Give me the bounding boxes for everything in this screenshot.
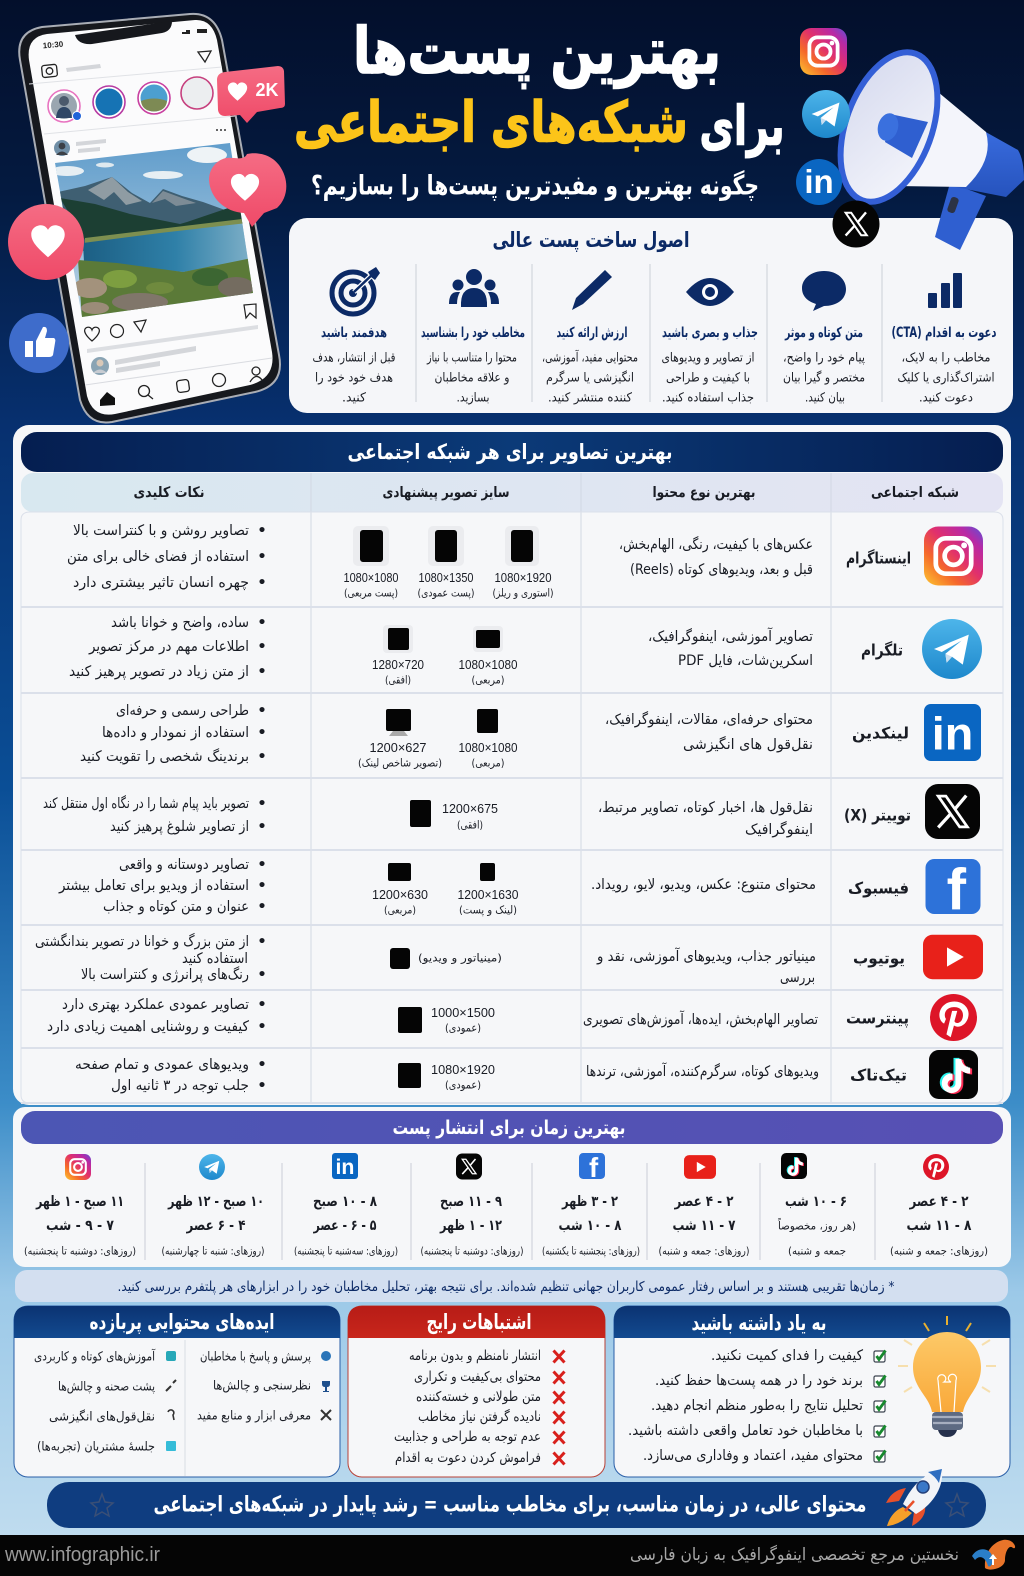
row: twitter x: •: [257, 796, 267, 812]
times title bar: [21, 1111, 1003, 1144]
principle 2 text: [783, 325, 865, 404]
row: linkedin: 1200×627: [370, 741, 427, 755]
title line 2 white: برای: [700, 94, 784, 158]
icon: light bulb: [898, 1316, 996, 1437]
row: linkedin: لینکدین: [852, 724, 909, 742]
row: twitter x: [43, 784, 980, 839]
row: linkedin: •: [257, 749, 267, 765]
row: tiktok: ویدیوهای کوتاه، سرگرم‌کننده، آموزشی، ترندها: [586, 1062, 819, 1080]
title: [294, 15, 784, 202]
row: facebook: •: [257, 899, 267, 915]
row: telegram: (مربعی): [472, 674, 504, 686]
row: telegram: 1080×1080: [458, 658, 518, 672]
remember header: [614, 1306, 1010, 1338]
remember list: کیفیت را فدای کمیت نکنید.: [711, 1348, 863, 1364]
time: pinterest: (روزهای: جمعه و شنبه): [890, 1244, 988, 1258]
post header: [54, 140, 70, 156]
time: youtube: (روزهای: جمعه و شنبه): [658, 1244, 750, 1258]
panel: best images table: [13, 425, 1011, 1105]
row: instagram: (پست مربعی): [344, 586, 398, 600]
principle 5 text: [421, 325, 525, 406]
time: youtube: ۲ - ۴ عصر: [674, 1194, 734, 1210]
row: pinterest: تصاویر الهام‌بخش، ایده‌ها، آموزش‌های تصویری: [583, 1010, 818, 1028]
principle 4 text: ارزش ارائه کنید: [556, 325, 628, 341]
icon: x circle: [832, 200, 880, 248]
commenter avatar: [91, 357, 109, 375]
mistakes list: انتشار نامنظم و بدون برنامه: [409, 1348, 541, 1364]
panel: principles: [289, 218, 1013, 413]
time: pinterest: ۲ - ۴ عصر: [909, 1194, 969, 1210]
row: facebook: (لینک و پست): [459, 904, 517, 916]
ideas header: ایده‌های محتوایی پربازده: [90, 1310, 274, 1334]
panel: content ideas: [14, 1306, 340, 1477]
icon: 2K like bubble: [217, 66, 285, 123]
icon: like circle: [9, 313, 69, 373]
icon: bar chart: [928, 273, 962, 308]
time: telegram: (روزهای: شنبه تا چهارشنبه): [162, 1244, 264, 1258]
row: twitter x: 1200×675: [442, 802, 498, 816]
icon: instagram: [800, 28, 847, 75]
megaphone rim: [822, 39, 956, 215]
icon: linkedin circle: [796, 159, 842, 205]
row: facebook: عنوان و متن کوتاه و جذاب: [103, 899, 249, 915]
row: pinterest: 1000×1500: [431, 1006, 495, 1020]
principle 3 text: با کیفیت و طراحی: [666, 370, 750, 386]
row: youtube: •: [257, 967, 267, 983]
table header row: نکات کلیدی: [134, 485, 204, 501]
row: instagram: عکس‌های با کیفیت، رنگی، الهام‌بخش،: [619, 536, 813, 553]
principle 6 text: کنید.: [342, 390, 366, 404]
megaphone trigger: [947, 196, 959, 214]
row: facebook: •: [257, 857, 267, 873]
principle 2 text: بیان کنید.: [805, 390, 845, 404]
principle 5 text: بسازید.: [456, 390, 490, 406]
principle 1 text: دعوت کنید.: [919, 390, 973, 406]
row: pinterest: •: [257, 1019, 267, 1035]
principles title: اصول ساخت پست عالی: [492, 228, 690, 252]
row: instagram: •: [257, 549, 267, 565]
principle 4 text: محتوایی مفید، آموزشی،: [542, 350, 638, 366]
mistakes list: متن طولانی و خسته‌کننده: [416, 1389, 541, 1405]
title line 1: بهترین پست‌ها: [353, 15, 721, 89]
icon: audience: [449, 269, 499, 307]
banner: [47, 1469, 986, 1528]
row: tiktok: تیک‌تاک: [850, 1066, 907, 1084]
note bar: * زمان‌ها تقریبی هستند و بر اساس رفتار عمومی کاربران جهانی تنظیم شده‌اند. برای نتیجه بهتر، تحلیل مخاطبان خود را در ابزارهای هر پلتفرم بررسی کنید.: [118, 1279, 895, 1295]
principle 4 text: کننده منتشر کنید.: [548, 390, 632, 406]
principle 2 text: متن کوتاه و موثر: [784, 325, 863, 341]
time: linkedin: (روزهای: سه‌شنبه تا پنجشنبه): [294, 1244, 398, 1258]
icon: pencil: [572, 270, 612, 310]
principle 1 text: مخاطب را به لایک،: [902, 350, 990, 366]
table header row: بهترین نوع محتوا: [652, 485, 756, 501]
principle 3 text: جذاب و بصری باشید: [662, 325, 758, 341]
row: linkedin: نقل‌قول های انگیزشی: [683, 736, 813, 753]
icon: eye: [686, 278, 734, 306]
time: telegram: [162, 1154, 264, 1258]
stories: [48, 77, 213, 122]
ideas left column: [34, 1348, 176, 1454]
row: instagram: •: [257, 523, 267, 539]
mistakes list: نادیده گرفتن نیاز مخاطب: [418, 1408, 541, 1425]
principle 6 text: قبل از انتشار، هدف: [312, 350, 396, 366]
phone mockup: [19, 14, 280, 423]
ideas right column: پرسش و پاسخ با مخاطبان: [200, 1348, 311, 1364]
time: instagram: ۷ - ۹ - شب: [46, 1218, 114, 1234]
row: telegram: اسکرین‌شات، فایل PDF: [678, 653, 813, 669]
row: instagram: استفاده از فضای خالی برای متن: [67, 549, 249, 565]
ideas left column: جلسهٔ مشتریان (تجربه‌ها): [37, 1438, 155, 1454]
row: youtube: [35, 932, 983, 986]
icon: speech bubble: [802, 271, 846, 311]
row: twitter x: از تصاویر شلوغ پرهیز کنید: [110, 819, 249, 835]
row: linkedin: برندینگ شخصی را تقویت کنید: [80, 747, 249, 765]
status time: 10:30: [42, 40, 64, 50]
mistakes list: محتوای بی‌کیفیت و تکراری: [414, 1369, 541, 1385]
principle 4 text: انگیزشی یا سرگرم‌: [546, 370, 634, 386]
row: facebook: استفاده از ویدیو برای تعامل بیشتر: [58, 878, 249, 894]
icon: footer logo: [972, 1540, 1015, 1570]
row: linkedin: استفاده از نمودار و داده‌ها: [102, 725, 249, 741]
row: instagram: •: [257, 575, 267, 591]
row: facebook: [58, 857, 981, 923]
row: facebook: تصاویر دوستانه و واقعی: [119, 857, 249, 873]
principle 3 text: [662, 325, 758, 404]
table header row: سایز تصویر پیشنهادی: [382, 485, 510, 501]
time: linkedin: ۸ - ۱۰ صبح: [313, 1194, 377, 1210]
row: telegram: [69, 615, 982, 686]
row: tiktok: 1080×1920: [431, 1063, 495, 1077]
table header row: شبکه اجتماعی: [871, 485, 959, 501]
mistakes list: [394, 1348, 564, 1466]
time: telegram: ۴ - ۶ عصر: [186, 1218, 246, 1234]
row: telegram: از متن زیاد در تصویر پرهیز کنید: [69, 664, 249, 680]
row: tiktok: •: [257, 1057, 267, 1073]
row: pinterest: [47, 994, 977, 1041]
time: facebook: ۲ - ۳ ظهر: [561, 1194, 618, 1210]
principle 3 text: جذاب استفاده کنید.: [662, 390, 754, 404]
row: tiktok: (عمودی): [445, 1078, 481, 1092]
row: instagram: 1080×1350: [418, 571, 474, 585]
principle 2 text: مختصر و گیرا بیان: [783, 370, 865, 386]
row: twitter x: نقل‌قول ها، اخبار کوتاه، تصاویر مرتبط،: [598, 800, 813, 816]
row: instagram: اینستاگرام: [846, 548, 911, 568]
megaphone cone: [895, 92, 988, 187]
time: instagram: ۱۱ صبح - ۱ ظهر: [35, 1194, 124, 1210]
row: tiktok: •: [257, 1078, 267, 1094]
row: linkedin: محتوای حرفه‌ای، مقالات، اینفوگرافیک،: [605, 711, 813, 728]
row: tiktok: جلب توجه در ۳ ثانیه اول: [111, 1078, 249, 1094]
row: telegram: •: [257, 639, 267, 655]
row: telegram: •: [257, 664, 267, 680]
phone notch: [75, 21, 172, 44]
row: instagram: تصاویر روشن و با کنتراست بالا: [73, 523, 249, 539]
row: youtube: استفاده کنید: [182, 951, 248, 967]
remember list: تحلیل نتایج را به‌طور منظم انجام دهید.: [651, 1398, 863, 1414]
phone body: [19, 14, 280, 423]
row: twitter x: تصویر باید پیام شما را در نگاه اول منتقل کند: [43, 795, 249, 812]
time: pinterest: ۸ - ۱۱ شب: [906, 1218, 972, 1234]
row: pinterest: تصاویر عمودی عملکرد بهتری دارد: [62, 997, 249, 1013]
panel: best posting times: [13, 1107, 1011, 1267]
time: x: ۹ - ۱۱ صبح: [440, 1194, 502, 1210]
principle 5 text: مخاطب خود را بشناسید: [421, 325, 525, 341]
status icons: [178, 29, 207, 34]
principle 6 text: [312, 325, 396, 404]
row: linkedin: (مربعی): [472, 756, 504, 770]
principle 2 text: پیام خود را واضح،: [783, 350, 865, 366]
post actions: [85, 304, 256, 341]
principle 6 text: هدف خود خود را: [315, 370, 393, 386]
row: instagram: 1080×1080: [344, 571, 399, 585]
remember list: [628, 1348, 886, 1464]
panel: common mistakes: [348, 1306, 605, 1477]
icon: linkedin circle: in: [804, 163, 834, 200]
time: linkedin: ۵ - ۶ - عصر: [313, 1218, 377, 1234]
principle 3 text: از تصاویر و ویدیوهای: [662, 350, 754, 366]
principle 4 text: [542, 325, 638, 406]
time: tiktok: ۶ - ۱۰ شب: [785, 1194, 847, 1210]
mistakes list: فراموش کردن دعوت به اقدام: [395, 1450, 541, 1466]
row: youtube: بررسی: [780, 970, 815, 986]
principle 5 text: محتوا را متناسب با نیاز: [426, 350, 517, 366]
row: instagram: 1080×1920: [494, 571, 552, 585]
time: facebook: [542, 1152, 640, 1258]
row: twitter x: اینفوگرافیک: [745, 821, 813, 838]
row: instagram: قبل و بعد، ویدیوهای کوتاه (Reels): [630, 562, 813, 578]
row: youtube: یوتیوب: [853, 948, 905, 968]
phone screen: [29, 20, 273, 415]
mistakes list: عدم توجه به طراحی و جذابیت: [394, 1429, 541, 1445]
row: facebook: 1200×1630: [458, 888, 519, 902]
row: pinterest: (عمودی): [445, 1022, 481, 1034]
row: pinterest: •: [257, 997, 267, 1013]
row: facebook: (مربعی): [384, 904, 416, 916]
row: linkedin: 1080×1080: [458, 741, 518, 755]
time: facebook: ۸ - ۱۰ شب: [558, 1218, 622, 1234]
row: telegram: ساده، واضح و خوانا باشد: [111, 615, 249, 631]
row: youtube: رنگ‌های پرانرژی و کنتراست بالا: [81, 965, 249, 983]
time: tiktok: جمعه و شنبه): [788, 1244, 846, 1258]
table title bar: بهترین تصاویر برای هر شبکه اجتماعی: [348, 440, 672, 464]
remember list: محتوای مفید، اعتماد و وفاداری می‌سازد.: [643, 1448, 863, 1464]
row: telegram: تصاویر آموزشی، اینفوگرافیک،: [648, 627, 813, 645]
row: linkedin: [80, 703, 981, 770]
ideas right column: [197, 1348, 331, 1424]
row: facebook: •: [257, 878, 267, 894]
title line 2 yellow: شبکه‌های اجتماعی: [294, 90, 688, 156]
icon: star left: [91, 1494, 113, 1516]
row: telegram: اطلاعات مهم در مرکز تصویر: [88, 639, 249, 655]
footer url: www.infographic.ir: [4, 1544, 160, 1566]
remember list: برند خود را در همه پست‌ها حفظ کنید.: [655, 1373, 863, 1389]
subtitle: چگونه بهترین و مفیدترین پست‌ها را بسازیم؟: [311, 170, 759, 202]
row: facebook: 1200×630: [372, 888, 428, 902]
time: instagram: (روزهای: دوشنبه تا پنجشنبه): [24, 1244, 136, 1258]
principle 6 text: هدفمند باشید: [321, 325, 387, 341]
ideas left column: پشت صحنه و چالش‌ها: [58, 1378, 155, 1394]
principle 1 text: اشتراک‌گذاری یا کلیک: [898, 370, 994, 386]
time: youtube: ۷ - ۱۱ شب: [672, 1218, 736, 1234]
row: facebook: محتوای متنوع: عکس، ویدیو، لایو، رویداد.: [591, 877, 816, 893]
panel: remember: [614, 1306, 1010, 1477]
row: pinterest: کیفیت و روشنایی اهمیت زیادی دارد: [47, 1019, 249, 1035]
time: x: ۱۲ - ۱ ظهر: [439, 1218, 502, 1234]
megaphone handle: [935, 183, 986, 250]
megaphone: [822, 39, 1024, 250]
row: tiktok: ویدیوهای عمودی و تمام صفحه: [75, 1057, 249, 1073]
ideas left column: نقل‌قول‌های انگیزشی: [49, 1408, 155, 1424]
icon: 2K like bubble: 2K: [255, 80, 279, 100]
time: facebook: (روزهای: پنجشنبه تا یکشنبه): [542, 1244, 640, 1258]
time: x: (روزهای: دوشنبه تا پنجشنبه): [420, 1244, 524, 1258]
row: facebook: فیسبوک: [848, 878, 909, 898]
row: instagram: [67, 523, 983, 600]
ideas right column: معرفی ابزار و منابع مفید: [197, 1408, 311, 1424]
row: linkedin: (تصویر شاخص لینک): [358, 756, 442, 770]
icon: telegram: [802, 90, 850, 138]
icon: heart circle left: [8, 204, 84, 280]
row: telegram: (افقی): [385, 674, 411, 686]
row: youtube: مینیاتور جذاب، ویدیوهای آموزشی، نقد و: [596, 947, 816, 965]
ideas right column: نظرسنجی و چالش‌ها: [213, 1378, 311, 1394]
time: pinterest: [890, 1154, 988, 1258]
remember header: به یاد داشته باشید: [692, 1311, 826, 1335]
time: tiktok: (هر روز، مخصوصاً: [778, 1217, 856, 1232]
row: telegram: 1280×720: [372, 658, 424, 672]
time: tiktok: [778, 1153, 856, 1258]
principle 1 text: [892, 325, 996, 406]
icon: rocket: [886, 1469, 942, 1526]
time: telegram: ۱۰ صبح - ۱۲ ظهر: [167, 1194, 264, 1210]
footer tagline: نخستین مرجع تخصصی اینفوگرافیک به زبان فارسی: [630, 1544, 959, 1565]
row: twitter x: •: [257, 819, 267, 835]
mistakes header: اشتباهات رایج: [426, 1310, 532, 1334]
megaphone hub: [875, 111, 928, 158]
principle 5 text: و علاقه مخاطبان: [434, 370, 510, 386]
row: instagram: (استوری و ریلز): [492, 586, 554, 600]
row: instagram: (پست عمودی): [418, 586, 474, 600]
row: twitter x: توییتر (X): [844, 806, 911, 824]
row: pinterest: پینترست: [846, 1008, 909, 1028]
ideas left column: آموزش‌های کوتاه و کاربردی: [34, 1348, 155, 1364]
megaphone back: [950, 126, 1024, 197]
icon: target: [332, 267, 380, 314]
row: telegram: تلگرام: [861, 640, 903, 660]
row: telegram: •: [257, 615, 267, 631]
row: tiktok: [75, 1050, 978, 1099]
row: linkedin: •: [257, 725, 267, 741]
post photo: landscape: [50, 140, 260, 320]
bottom nav: [100, 392, 115, 406]
time: instagram: [24, 1154, 136, 1258]
time: linkedin: [294, 1153, 398, 1258]
table header row: [21, 473, 1003, 512]
time: x: [420, 1154, 524, 1258]
row: youtube: •: [257, 934, 267, 950]
time: youtube: [658, 1155, 750, 1258]
top bar icons: [41, 51, 211, 78]
table title bar: [21, 432, 1003, 472]
row: linkedin: •: [257, 703, 267, 719]
ideas header: [14, 1306, 340, 1338]
row: instagram: چهره انسان تاثیر بیشتری دارد: [73, 575, 249, 591]
times title bar: بهترین زمان برای انتشار پست: [392, 1117, 626, 1139]
row: youtube: (مینیاتور و ویدیو): [418, 952, 502, 964]
icon: star right: [946, 1494, 968, 1516]
row: twitter x: (افقی): [457, 818, 483, 832]
icon: heart bubble right: [209, 153, 286, 227]
remember list: با مخاطبان خود تعامل واقعی داشته باشید.: [628, 1423, 863, 1439]
row: youtube: از متن بزرگ و خوانا در تصویر بندانگشتی: [35, 932, 249, 950]
footer: [0, 1535, 1024, 1576]
mistakes header: [348, 1306, 605, 1338]
note bar: [15, 1270, 1008, 1302]
row: linkedin: طراحی رسمی و حرفه‌ای: [116, 703, 249, 719]
